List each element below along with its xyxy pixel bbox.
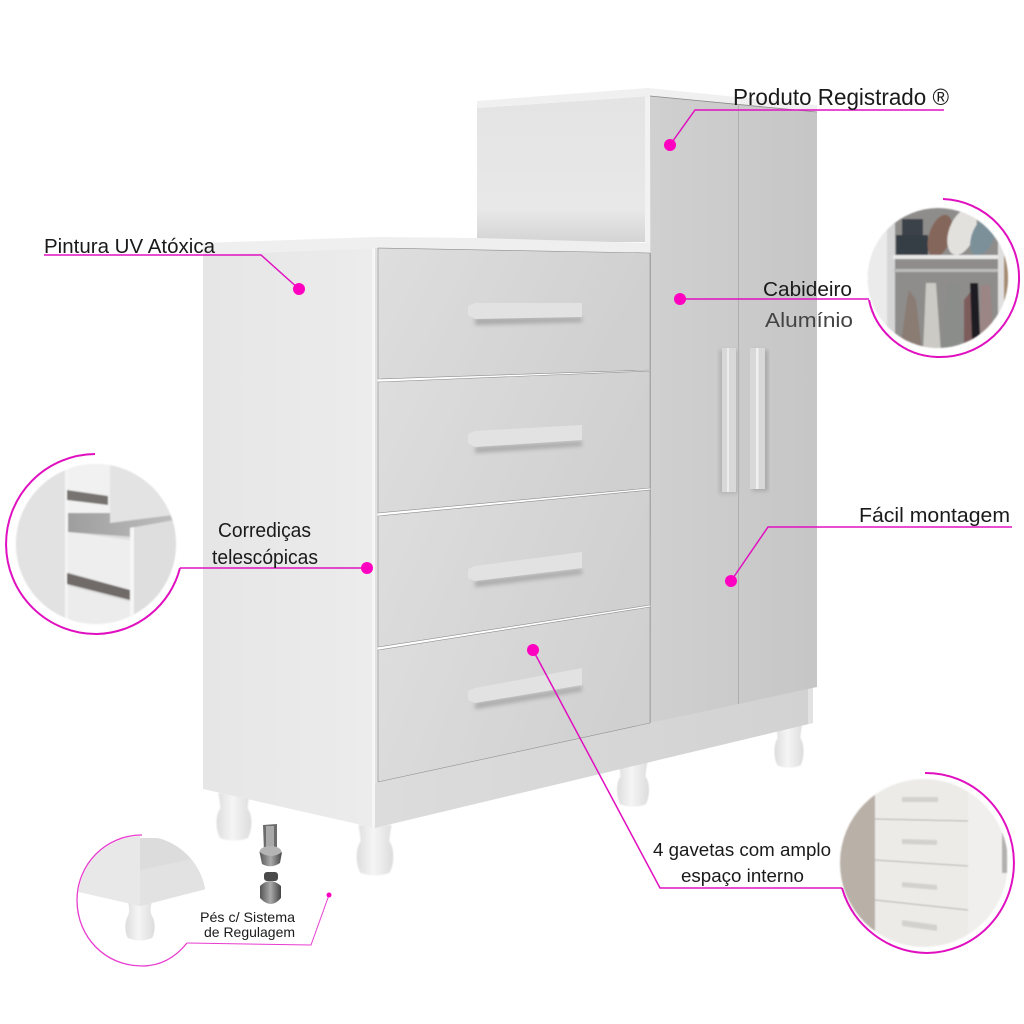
inset: four drawers <box>840 775 1010 955</box>
front edge strip <box>372 248 375 828</box>
callout: Corrediças telescópicas: telescópicas <box>212 547 318 569</box>
callout: 4 gavetas com amplo espaço interno: 4 gavetas com amplo <box>653 840 831 860</box>
callout: Corrediças telescópicas <box>6 454 373 634</box>
drawer 1 <box>378 248 650 379</box>
callout: Produto Registrado <box>664 84 949 151</box>
leg: middle <box>617 762 649 807</box>
label: Pés c/ Sistema de Regulagem: Pés c/ Sistema <box>200 909 295 925</box>
callout: foot regulation line <box>77 835 332 966</box>
side panel <box>203 248 375 828</box>
drawer 3 <box>378 490 650 647</box>
upper top slab <box>477 88 817 112</box>
upper open niche back panel <box>477 96 650 242</box>
callout: 4 gavetas com amplo espaço interno: espaço interno <box>681 866 804 886</box>
lower top slab <box>203 237 650 255</box>
callout: Cabideiro Alumínio: Cabideiro <box>763 279 852 301</box>
base plinth <box>375 687 813 828</box>
callout: Cabideiro Alumínio <box>674 199 1019 357</box>
inset: telescopic slides <box>16 464 176 624</box>
inset: furniture corner and foot <box>78 836 205 940</box>
leg: front <box>357 825 393 875</box>
callout: 4 gavetas com amplo espaço interno <box>527 644 1014 953</box>
inset: wardrobe interior <box>868 207 1009 349</box>
leg: rear left <box>217 793 251 841</box>
callout: Pintura UV Atóxica <box>44 236 305 295</box>
callout: Produto Registrado: Produto Registrado ® <box>733 84 949 110</box>
adjustable foot parts <box>260 824 282 904</box>
callout: Pintura UV Atóxica: Pintura UV Atóxica <box>44 236 216 258</box>
drawer 4 <box>378 607 650 782</box>
label: Pés c/ Sistema de Regulagem <box>200 909 295 940</box>
door handles <box>719 348 768 494</box>
callout: Corrediças telescópicas: Corrediças <box>218 520 311 542</box>
leg: right <box>774 724 804 768</box>
furniture: white dresser with drawers and doors <box>203 88 817 875</box>
drawer 2 <box>378 371 650 513</box>
callout: Fácil montagem <box>725 505 1012 587</box>
label: Pés c/ Sistema de Regulagem: de Regulagem <box>204 924 295 940</box>
callout: Cabideiro Alumínio: Alumínio <box>765 310 853 332</box>
callout: Fácil montagem: Fácil montagem <box>859 505 1010 527</box>
right door cabinet <box>650 96 817 723</box>
